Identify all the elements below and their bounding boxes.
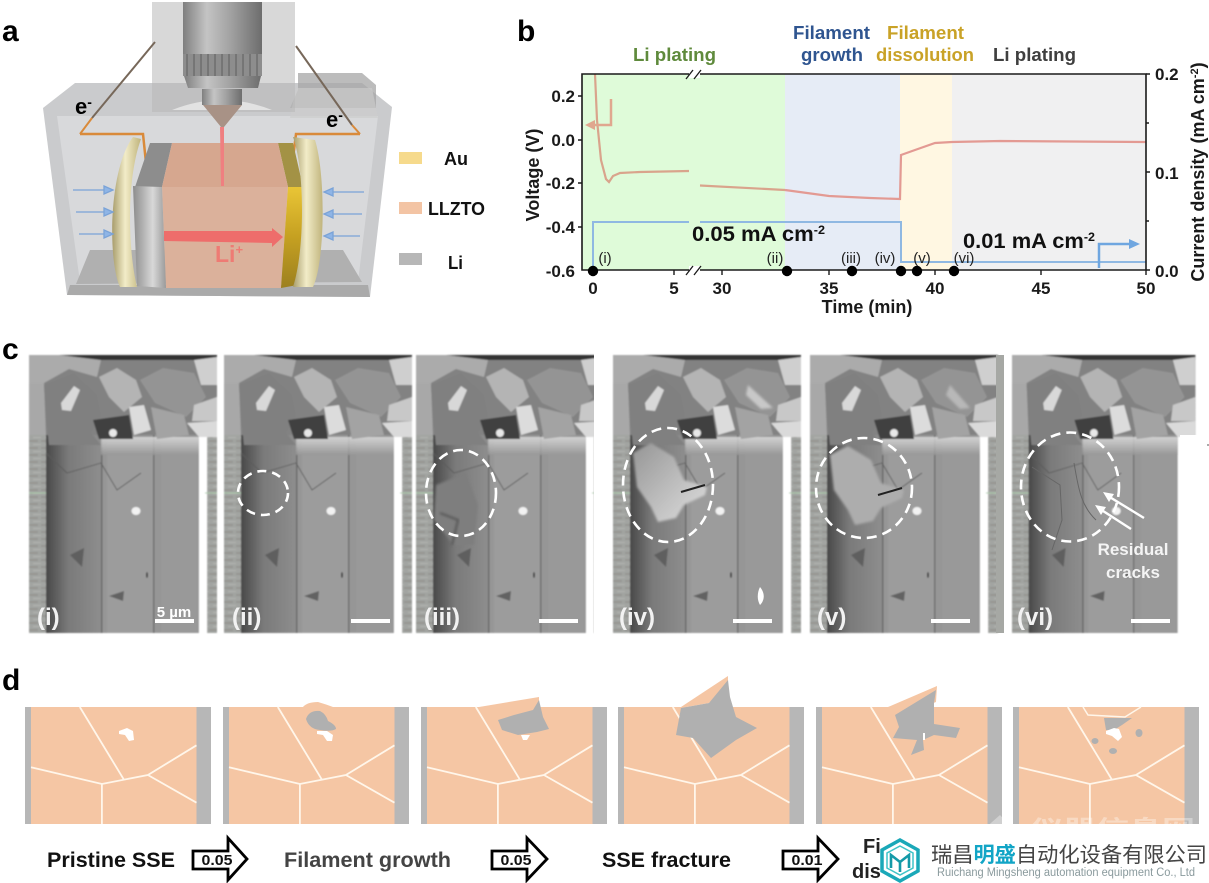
label: electron left: - <box>87 94 92 110</box>
annotation: 0.05 mA cm-2: 0.05 mA cm <box>692 223 808 246</box>
panel label: b: b <box>517 15 535 48</box>
right axis title: ) <box>1188 62 1208 68</box>
legend: materials <box>399 149 485 273</box>
process arrow 0.01: 0.01 <box>792 852 822 869</box>
label: electron left: e <box>75 94 87 119</box>
legend: materials: LLZTO <box>428 199 485 219</box>
state labels: (vi) <box>954 250 974 267</box>
axis break marks <box>686 70 701 275</box>
SEM frame ii: (ii) <box>232 604 261 631</box>
stage label: filament dissolution <box>852 836 959 883</box>
SEM frame iii: (iii) <box>424 604 460 631</box>
right axis title: -2 <box>1189 68 1201 78</box>
x axis labels <box>588 279 1155 298</box>
state labels: (ii) <box>767 250 783 267</box>
region headings: Filament <box>793 23 870 43</box>
region headings: Filament <box>887 23 964 43</box>
x axis labels: 30 <box>713 279 731 298</box>
annotation: 0.01 mA cm-2: -2 <box>1084 230 1095 244</box>
watermark logo block <box>881 838 1209 883</box>
SEM frame vi: (vi) <box>1017 604 1053 631</box>
state labels: (i) <box>598 250 612 267</box>
x axis labels: 45 <box>1032 279 1050 298</box>
panel a: in situ cell schematic <box>43 2 392 297</box>
right axis labels: 0.1 <box>1155 164 1179 183</box>
process arrow 0.05 <box>193 838 247 880</box>
chamber box <box>43 73 392 297</box>
SEM frame iv <box>613 355 801 633</box>
process arrow 0.05: 0.05 <box>202 852 232 869</box>
stage label: filament growth: Filament growth <box>284 849 451 872</box>
annotation: 0.01 mA cm-2: 0.01 mA cm <box>963 230 1079 253</box>
voltage curve <box>595 74 1146 199</box>
left axis title: Voltage (V) <box>523 129 543 221</box>
region headings: Li plating <box>633 45 716 65</box>
SEM frame iii <box>416 353 606 635</box>
stage label: pristine: Pristine SSE <box>47 849 175 872</box>
process arrow 0.05 second: 0.05 <box>500 852 532 869</box>
x axis labels: 35 <box>820 279 838 298</box>
state labels: (v) <box>913 250 931 267</box>
SEM frame iv: (iv) <box>619 604 655 631</box>
schematic: filament growth <box>223 702 409 824</box>
schematic: SSE fracture <box>618 676 804 824</box>
watermark: 仪器信息网 <box>1030 816 1195 841</box>
SEM frame i <box>29 355 217 633</box>
state markers <box>588 266 959 276</box>
process arrow 0.05 second <box>492 838 547 880</box>
x axis labels: 5 <box>669 279 679 298</box>
left axis labels: -0.6 <box>546 262 575 281</box>
panel label: d: d <box>2 664 20 697</box>
panel d: filament evolution schematics <box>25 676 1199 824</box>
process arrow 0.01 <box>783 838 838 880</box>
SEM frame ii <box>224 355 412 633</box>
x axis labels: 50 <box>1137 279 1155 298</box>
arrow: voltage axis <box>585 99 611 130</box>
right axis labels: 0.2 <box>1155 65 1179 84</box>
stage label: filament dissolution: dissolution <box>852 861 959 883</box>
schematic: residual cracks <box>1013 707 1199 824</box>
left axis labels: 0.2 <box>551 87 575 106</box>
current density curve <box>593 222 1146 270</box>
SEM frame i: 5 µm <box>157 604 191 621</box>
panel label: c: c <box>2 333 19 366</box>
annotation: residual cracks: cracks <box>1106 563 1160 582</box>
left axis labels: -0.4 <box>546 218 576 237</box>
x axis labels: 0 <box>588 279 598 298</box>
watermark <box>975 815 1195 841</box>
wires <box>80 42 360 182</box>
left axis labels: -0.2 <box>546 174 575 193</box>
legend: materials: Au <box>444 149 468 169</box>
label: Li+: Li <box>215 241 235 267</box>
SEM frame v <box>810 355 1004 633</box>
label: Li+: + <box>235 242 243 257</box>
label: electron right: e <box>326 107 338 132</box>
region headings: Li plating <box>993 45 1076 65</box>
x axis labels: 40 <box>926 279 944 298</box>
SEM frame i: (i) <box>37 604 60 631</box>
watermark logo block: Ruichang Mingsheng automation equipment Co., Ltd <box>937 867 1195 879</box>
right axis labels: 0.0 <box>1155 262 1179 281</box>
schematic: filament dissolution <box>816 686 1002 824</box>
panel label: a: a <box>2 15 19 48</box>
x axis title: Time (min) <box>822 297 912 317</box>
SEM frame vi <box>1012 355 1198 635</box>
state labels <box>598 250 974 267</box>
arrow: current axis <box>1099 239 1140 268</box>
left axis labels: 0.0 <box>551 131 575 150</box>
schematic: filament extension <box>421 697 607 824</box>
laser beam <box>220 127 224 186</box>
panel b: voltage and current chart <box>523 23 1208 317</box>
schematic: pristine <box>25 707 211 824</box>
stage label: SSE fracture: SSE fracture <box>602 849 731 872</box>
annotation: 0.05 mA cm-2: -2 <box>814 223 825 237</box>
axes frame <box>582 74 1146 270</box>
stage label: filament dissolution: Filament <box>863 836 946 858</box>
right axis title: Current density (mA cm <box>1188 78 1208 282</box>
watermark logo block: 瑞昌明盛自动化设备有限公司 <box>931 844 1207 867</box>
ticks <box>578 74 1150 275</box>
right axis labels <box>1155 65 1179 281</box>
region headings: dissolution <box>876 45 974 65</box>
ion arrows <box>73 186 364 240</box>
annotation: residual cracks <box>1095 492 1168 582</box>
region headings: growth <box>801 45 863 65</box>
state labels: (iv) <box>875 250 895 267</box>
state labels: (iii) <box>841 250 861 267</box>
left axis labels <box>546 87 576 281</box>
microscope column <box>152 2 295 127</box>
legend: materials: Li <box>448 253 463 273</box>
region shading <box>582 74 1146 270</box>
arrow: Li+ flux <box>164 228 283 247</box>
SEM frame v: (v) <box>817 604 846 631</box>
cell: Li, LLZTO, Au <box>112 137 323 288</box>
region headings <box>633 23 1076 65</box>
panel c: SEM image series <box>29 353 1198 635</box>
annotation: residual cracks: Residual <box>1098 540 1168 559</box>
label: electron right: - <box>338 107 343 123</box>
